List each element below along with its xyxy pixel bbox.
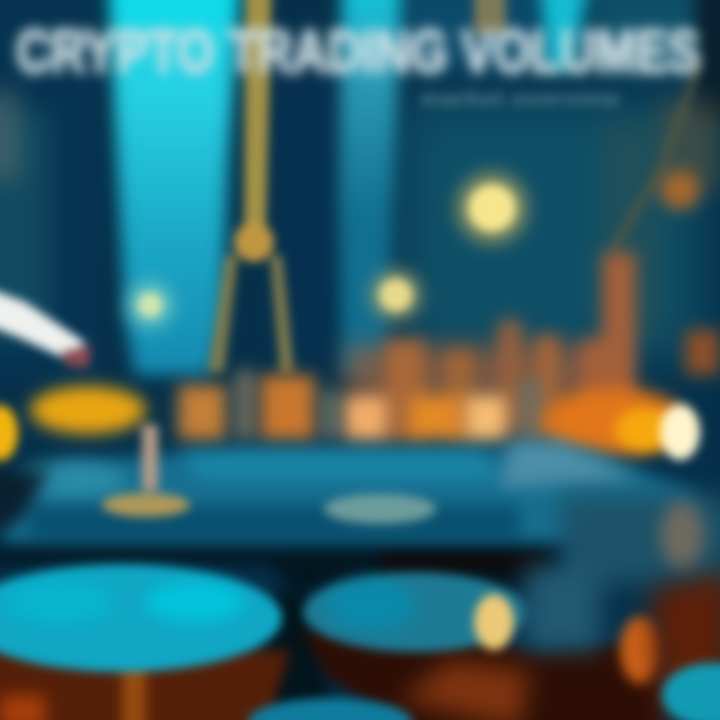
shadow: gap between basins — [240, 590, 335, 720]
pool: bottom right water — [662, 663, 720, 720]
tower: right thin tower — [608, 60, 704, 252]
light beam: middle — [338, 0, 402, 375]
lights: window row — [345, 396, 506, 440]
pedestal: small dish — [102, 425, 190, 517]
lights: golden left edge — [0, 405, 18, 461]
icon: white diagonal streak — [0, 285, 85, 362]
coin: glowing yellow light — [474, 594, 514, 650]
light beam: right — [538, 0, 590, 70]
pedestal: grey right column — [660, 501, 704, 569]
lights: orange right glow — [620, 616, 660, 684]
tower: distant spire — [474, 0, 506, 35]
lights: golden left dish — [30, 386, 146, 434]
lights: bright orange glow — [543, 388, 700, 460]
platform: blue table — [0, 440, 720, 585]
coins: glowing orbs — [126, 170, 700, 329]
shadow: dark band — [0, 548, 560, 590]
pool: bottom centre water — [248, 698, 412, 720]
pedestal: pale dish — [324, 494, 436, 524]
light beam: large left — [108, 0, 240, 375]
skyline: orange haze — [345, 345, 615, 435]
wall: dark copper right — [650, 570, 720, 720]
pool: middle basin — [300, 565, 660, 720]
tower: golden spire — [208, 0, 294, 372]
shadow: dark left corner — [0, 470, 50, 530]
column: grey posts between lights — [236, 370, 542, 440]
subtitle: market overview — [420, 86, 621, 111]
pool: large left basin — [0, 564, 290, 720]
skyline: orange glowing buildings — [178, 252, 720, 440]
